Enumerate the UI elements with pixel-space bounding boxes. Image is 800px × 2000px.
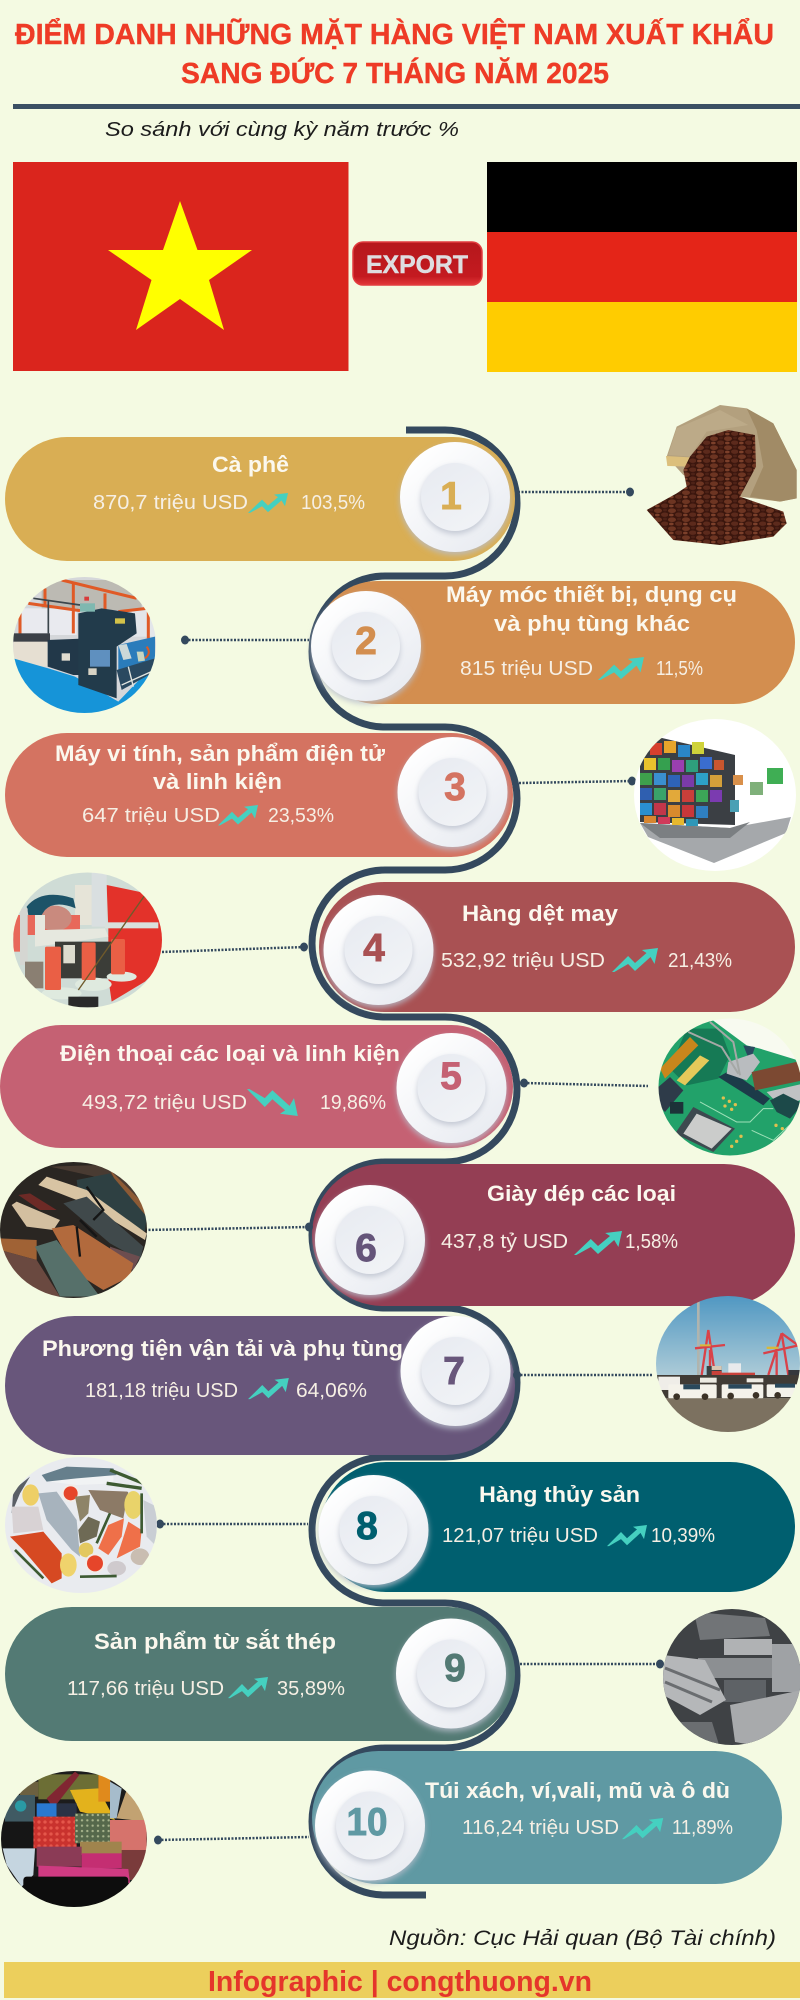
panel: item 4 textiles [319,882,795,1012]
item name [446,582,737,636]
icon: port with trucks photo [650,1295,800,1435]
number disc 4: 4 [363,927,385,970]
item name: Cà phê [212,452,289,477]
number disc 7 [400,1316,510,1426]
item name: và linh kiện [153,769,282,794]
item name: Hàng thủy sản [479,1482,640,1507]
item name: Phương tiện vận tải và phụ tùng [42,1336,403,1361]
value row [460,657,703,680]
number disc 5: 5 [440,1055,462,1098]
number disc 9: 9 [444,1647,466,1690]
icon: Germany flag [487,162,797,372]
footer banner: Infographic | congthuong.vn [208,1966,592,1998]
value row: 117,66 triệu USD [67,1678,224,1700]
panel: item 3 computers [5,733,513,857]
icon: export button [353,242,482,285]
value row [442,1525,715,1547]
number disc 3 [398,737,508,847]
value row: 815 triệu USD [460,658,593,680]
value row: 647 triệu USD [82,805,220,827]
value row [67,1677,345,1700]
number disc 8 [318,1475,428,1585]
item name: Điện thoại các loại và linh kiện [60,1041,400,1066]
item name: Máy móc thiết bị, dụng cụ [446,582,737,607]
value row: 437,8 tỷ USD [441,1231,568,1253]
icon: coffee sack photo [647,405,797,545]
value row: 35,89% [277,1678,345,1700]
panel: item 10 bags [312,1751,782,1884]
value row: 11,89% [672,1817,733,1839]
icon: machinery photo [13,577,156,713]
icon: shoes photo [0,1160,153,1303]
panel: item 2 machinery [311,581,795,704]
number disc 10: 10 [346,1801,388,1844]
value row: 64,06% [296,1380,367,1402]
footer banner [4,1962,800,1998]
item name: Máy vi tính, sản phẩm điện tử [55,741,385,766]
icon: circuit board photo [658,1018,800,1156]
value row: 10,39% [651,1525,715,1547]
number disc 2: 2 [355,620,377,663]
number disc 9 [396,1618,506,1728]
value row: 19,86% [320,1092,386,1114]
icon: Vietnam flag [13,162,348,371]
item name: Hàng dệt may [462,901,619,926]
value row: 11,5% [656,658,703,680]
value row: 23,53% [268,805,334,827]
value row: 1,58% [625,1231,678,1253]
value row: 493,72 triệu USD [82,1092,247,1114]
icon: export button: EXPORT [366,251,468,279]
value row [462,1817,733,1839]
number disc 6 [315,1185,425,1295]
number disc 6: 6 [355,1227,377,1270]
value row [93,492,365,514]
value row [82,1089,386,1116]
icon: laptop with apps photo [630,715,800,875]
item name: Giày dép các loại [487,1181,676,1206]
panel: item 5 phones [0,1025,513,1148]
icon: steel photo [660,1608,800,1748]
number disc 8: 8 [356,1505,378,1548]
title: ĐIỂM DANH NHỮNG MẶT HÀNG VIỆT NAM XUẤT KHẨU [15,17,774,51]
number disc 3: 3 [444,766,466,809]
dotted connectors [145,488,664,1844]
item name: Sản phẩm từ sắt thép [94,1629,336,1654]
panel: item 6 footwear [312,1164,795,1306]
number disc 1 [400,442,510,552]
value row: 121,07 triệu USD [442,1525,598,1547]
value row: 870,7 triệu USD [93,492,248,514]
value row [441,948,732,972]
icon: sewing photo [13,872,162,1008]
panel: item 9 steel [5,1607,515,1741]
item name [55,741,385,794]
panel: item 1 coffee [5,437,515,561]
item name: Túi xách, ví,vali, mũ và ô dù [425,1778,730,1803]
value row: 21,43% [668,950,732,972]
icon: bags photo [1,1771,147,1907]
value row: 532,92 triệu USD [441,950,605,972]
value row: 116,24 triệu USD [462,1817,619,1839]
number disc 10 [315,1770,425,1880]
icon: seafood photo [5,1457,157,1593]
value row [85,1378,367,1402]
number disc 5 [396,1033,506,1143]
serpentine connector [312,430,517,1895]
panel: item 7 vehicles [5,1316,515,1455]
value row: 103,5% [301,492,365,514]
number disc 7: 7 [443,1350,465,1393]
value row [441,1231,678,1255]
title: SANG ĐỨC 7 THÁNG NĂM 2025 [181,56,609,90]
source note: Nguồn: Cục Hải quan (Bộ Tài chính) [389,1927,776,1950]
item name: và phụ tùng khác [494,611,690,636]
number disc 2 [311,591,421,701]
panel: item 8 seafood [318,1462,795,1592]
subtitle: So sánh với cùng kỳ năm trước % [105,119,459,141]
value row [82,805,334,827]
value row: 181,18 triệu USD [85,1380,238,1402]
number disc 1: 1 [440,475,462,518]
number disc 4 [324,895,434,1005]
title [15,17,774,90]
